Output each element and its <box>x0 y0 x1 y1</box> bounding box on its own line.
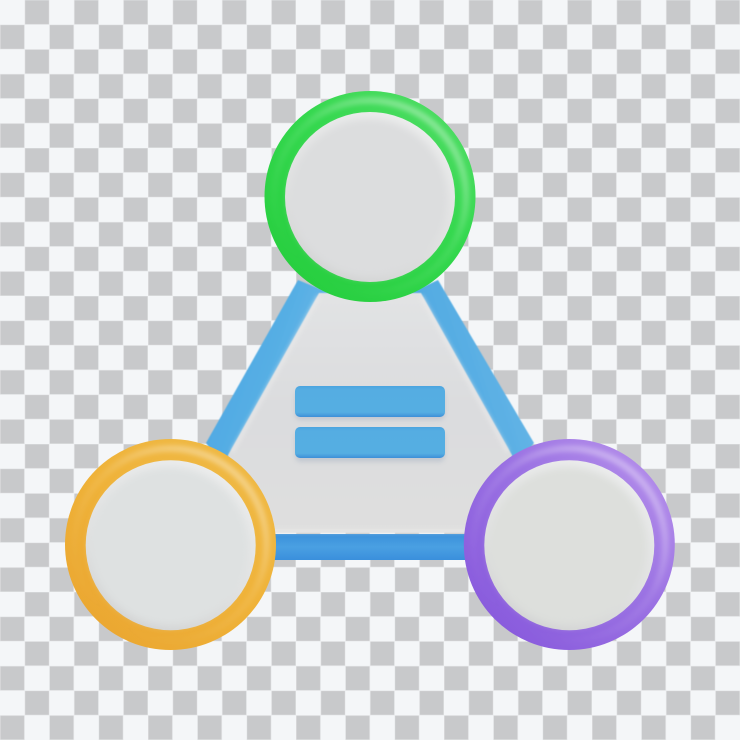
green face centre <box>290 119 448 277</box>
green ring highlight <box>274 100 466 292</box>
node: orange circle <box>65 439 276 650</box>
purple ring highlight <box>473 448 665 640</box>
plate edge highlight <box>232 296 508 531</box>
triangle frame and plate <box>206 280 534 560</box>
lower bar <box>295 427 445 458</box>
bottom blue strut <box>262 534 478 560</box>
node: purple circle <box>464 439 675 650</box>
orange ring highlight <box>74 448 266 640</box>
orange ring <box>65 439 276 650</box>
grey triangular plate <box>228 293 512 533</box>
orange node face <box>86 460 256 630</box>
green ring <box>264 91 476 302</box>
purple ring <box>464 439 675 650</box>
green node face <box>285 112 455 282</box>
equals sign <box>295 386 445 462</box>
left blue strut <box>206 280 330 470</box>
right blue strut <box>410 280 534 470</box>
purple node face <box>484 460 654 630</box>
orange face centre <box>91 467 249 625</box>
upper bar <box>295 386 445 417</box>
node: green circle <box>264 91 476 302</box>
purple face centre <box>489 467 647 625</box>
bar shadows <box>295 390 445 420</box>
